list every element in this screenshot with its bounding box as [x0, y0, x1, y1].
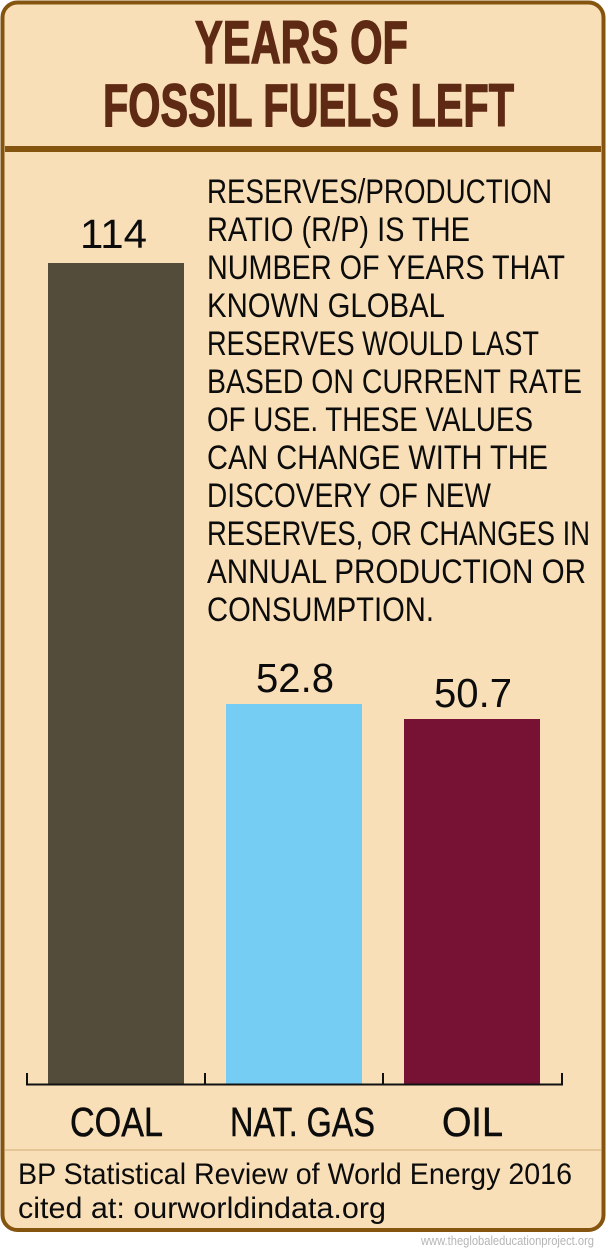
value: natural gas: 52.8 [256, 655, 334, 701]
text block: explanation [207, 173, 590, 629]
source credit [18, 1158, 572, 1225]
source credit: BP Statistical Review of World Energy 2016 [18, 1158, 572, 1191]
title [103, 9, 514, 139]
label: natural gas: NAT. GAS [230, 1099, 375, 1145]
axis [27, 1073, 562, 1084]
bar chart [27, 211, 562, 1145]
text block: explanation: RATIO (R/P) IS THE [207, 211, 470, 249]
text block: explanation: CONSUMPTION. [207, 591, 434, 629]
text block: explanation: KNOWN GLOBAL [207, 287, 445, 325]
source credit: cited at: ourworldindata.org [18, 1192, 386, 1225]
title: YEARS OF [195, 9, 408, 76]
label: coal: COAL [70, 1099, 163, 1145]
text block: explanation: CAN CHANGE WITH THE [207, 439, 548, 477]
text block: explanation: OF USE. THESE VALUES [207, 401, 533, 439]
value: coal: 114 [80, 211, 147, 257]
value: oil: 50.7 [434, 670, 512, 716]
bar: natural gas [226, 704, 362, 1084]
text block: explanation: DISCOVERY OF NEW [207, 477, 491, 515]
bar: coal [48, 263, 184, 1084]
label: oil: OIL [442, 1099, 503, 1145]
bar: oil [404, 719, 540, 1084]
